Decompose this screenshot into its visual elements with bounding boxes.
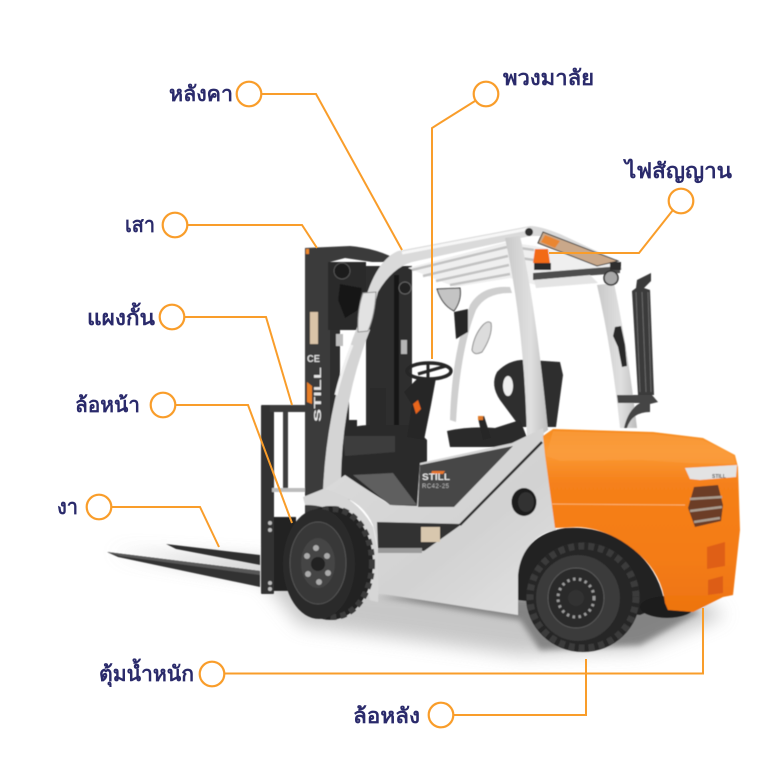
label: load backrest: แผงกั้น <box>87 302 156 330</box>
rear wheel <box>526 542 640 652</box>
counterweight cut-outs <box>707 542 725 569</box>
cooling grille <box>688 485 723 527</box>
roof guard slats <box>408 242 620 287</box>
callout: load backrest <box>87 302 292 405</box>
mast decal <box>310 312 318 344</box>
badge brand: STILL <box>712 474 726 480</box>
beacon light <box>533 249 551 270</box>
label: roof: หลังคา <box>169 83 233 106</box>
callout: rear wheel <box>353 659 586 728</box>
callout: roof <box>169 82 402 250</box>
mast <box>305 246 412 530</box>
seat <box>447 360 563 447</box>
door handle <box>613 326 627 367</box>
callout: forks <box>57 495 219 547</box>
rear silver badge <box>685 465 737 480</box>
front fender <box>303 489 378 602</box>
side mirror on pillar <box>358 292 376 332</box>
label: forks: งา <box>57 496 78 519</box>
STILL cab panel <box>418 446 513 507</box>
label: mast: เสา <box>125 214 155 237</box>
callout: signal light <box>549 158 733 253</box>
rear roof pillar <box>597 283 637 428</box>
mast STILL logo: STILL <box>313 367 324 422</box>
callout: steering wheel <box>432 67 594 359</box>
counterweight underside <box>640 596 694 618</box>
label: counterweight: ตุ้มน้ำหนัก <box>99 658 194 688</box>
forklift illustration <box>107 226 740 655</box>
rear main pillar <box>505 236 548 445</box>
light grey body <box>323 428 556 615</box>
label: front wheel: ล้อหน้า <box>75 393 140 417</box>
fuel cap <box>512 488 536 516</box>
callout: front wheel <box>75 393 292 523</box>
label: signal light: ไฟสัญญาน <box>623 158 733 184</box>
mast CE mark: CE <box>307 354 320 365</box>
interior mirrors <box>437 288 491 354</box>
forks <box>107 544 260 587</box>
label: rear wheel: ล้อหลัง <box>353 704 420 728</box>
inner arch pillar <box>450 287 512 422</box>
panel model: RC42-25 <box>422 484 450 490</box>
exhaust pipe <box>617 273 658 428</box>
steering wheel <box>407 363 451 379</box>
rear crossbar <box>533 266 620 280</box>
warning strip <box>538 232 618 266</box>
roof frame <box>360 226 622 330</box>
rear wheel arch <box>518 528 665 615</box>
steering wheel and dash <box>342 363 451 506</box>
ground shadow <box>110 552 725 655</box>
callout: counterweight <box>99 608 703 688</box>
front roof pillar <box>323 320 370 490</box>
load backrest <box>261 405 308 594</box>
body lower dark band <box>377 442 542 553</box>
front wheel <box>283 506 373 620</box>
panel brand: STILL <box>422 472 451 482</box>
orange counterweight <box>543 429 740 612</box>
callout: mast <box>125 213 317 248</box>
mast orange tab <box>307 382 312 404</box>
label: steering wheel: พวงมาลัย <box>503 67 594 90</box>
